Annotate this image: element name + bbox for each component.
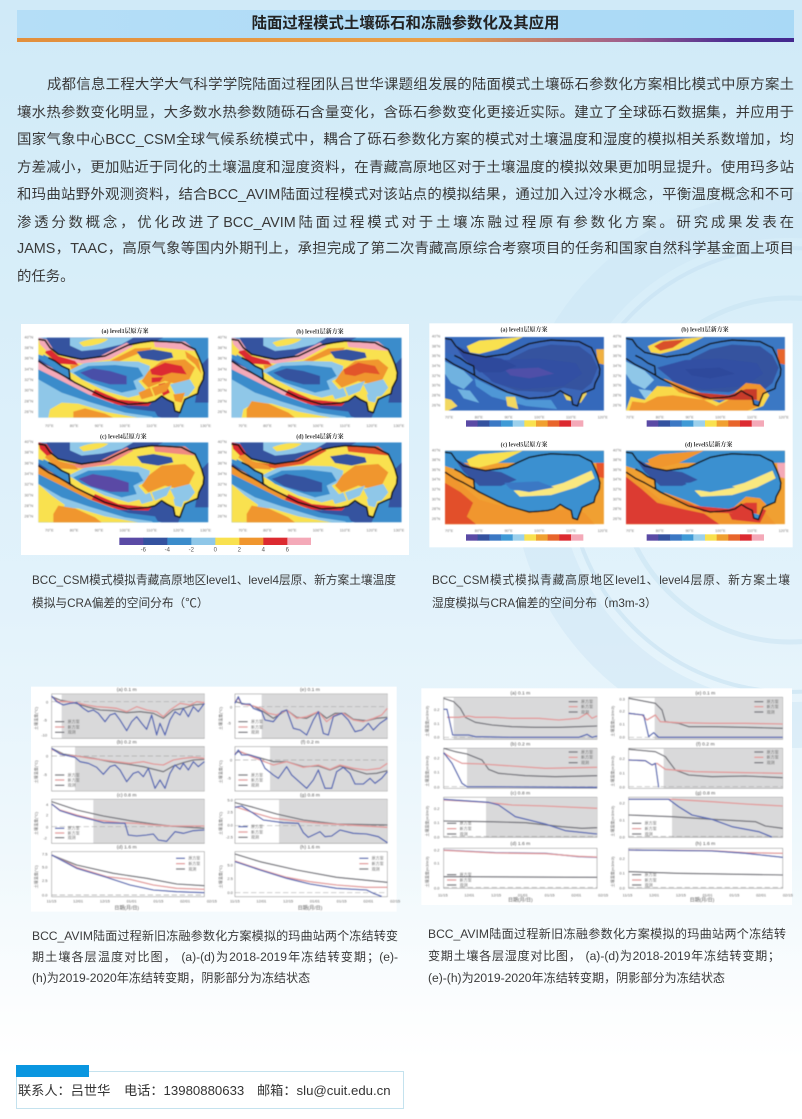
map b: 38°N: [218, 345, 227, 350]
moisture chart headings and axes: 0.2: [434, 806, 440, 811]
moisture chart headings and axes: 0.1: [619, 870, 626, 875]
moisture chart headings and axes: 土壤湿度(m3/m3): [424, 856, 430, 887]
chart headings and axes: 2.5: [227, 876, 234, 881]
moisture chart headings and axes: 土壤湿度(m3/m3): [424, 805, 430, 837]
map c: 38°N: [24, 450, 33, 455]
figure: soil moisture bias maps: [429, 323, 793, 548]
moisture chart headings and axes: 土壤湿度(m3/m3): [609, 856, 615, 887]
moisture chart headings and axes: 0.1: [619, 722, 626, 727]
moisture chart headings and axes: 11/15 12/01 12/15 01/01 01/15 02/01 02/15: [438, 893, 609, 898]
chart headings and axes: 0: [230, 704, 233, 709]
moisture chart headings and axes: 0.1: [434, 860, 440, 865]
intro text block: JAMS，TAAC，高原气象等国内外期刊上，承担完成了第二次青藏高原综合考察项目的任务和国家自然科学基金面上项目: [17, 241, 794, 257]
moisture chart headings and axes: (f) 0.2 m: [696, 741, 715, 747]
intro text block: 成都信息工程大学大气科学学院陆面过程团队吕世华课题组发展的陆面模式土壤砾石参数化方案相比模式中原方案土: [47, 77, 794, 93]
moisture chart headings and axes: (a) 0.1 m: [510, 690, 530, 696]
chart headings and axes: 土壤温度(°C): [33, 706, 39, 730]
moisture chart headings and axes: 土壤湿度(m3/m3): [424, 755, 430, 787]
caption: moisture maps: 湿度模拟与CRA偏差的空间分布（m3m-3）: [432, 597, 657, 610]
chart headings and axes: 5.0: [227, 797, 234, 802]
chart headings and axes: 5.0: [227, 863, 234, 868]
moisture chart headings and axes: 0.2: [619, 756, 626, 761]
caption: moisture series: (e)-(h)为2019-2020年冻结转变期，阴影部分为冻结状态: [428, 971, 725, 985]
moisture map b: 30°N: [613, 384, 622, 388]
moisture map a: 28°N: [432, 394, 441, 397]
chart c: 原方案: [68, 825, 80, 831]
moisture chart e: [629, 697, 783, 739]
map a: 40°N: [24, 334, 33, 339]
moisture chart c: 新方案: [460, 825, 472, 831]
moisture map d: [613, 448, 789, 533]
moisture chart h: 原方案: [645, 871, 657, 877]
intro text block: 的任务。: [17, 269, 75, 285]
map d: 70°E 80°E 90°E 100°E 110°E 120°E 130°E: [238, 528, 405, 533]
moisture map c: 36°N: [432, 468, 441, 472]
chart headings and axes: 土壤温度(°C): [217, 865, 223, 888]
contact text: 电话：13980880633: [124, 1083, 244, 1098]
moisture chart headings and axes: 0.1: [434, 770, 440, 775]
moisture map b: [613, 335, 789, 419]
colour bar: -2: [189, 548, 195, 554]
chart headings and axes: 11/15 12/01 12/15 01/01 01/15 02/01 02/15: [230, 899, 401, 904]
chart headings and axes: 0.0: [42, 893, 48, 898]
caption: moisture series: [428, 927, 786, 985]
moisture chart f: 新方案: [767, 754, 779, 760]
moisture map c: 70°E 80°E 90°E 100°E 110°E 120°E: [445, 529, 608, 533]
map b: 26°N: [218, 409, 227, 414]
moisture chart g: [629, 797, 783, 837]
chart a: [52, 694, 204, 738]
caption: moisture maps: BCC_CSM模式模拟青藏高原地区level1、level4层原、新方案土壤: [432, 574, 790, 587]
intro text block: 国家气象中心BCC_CSM全球气候系统模式中，耦合了砾石参数化方案的模式对土壤温度和湿度的模拟相关系数增加，均: [17, 132, 794, 148]
map b: [218, 334, 405, 428]
moisture map b: 34°N: [613, 364, 622, 368]
chart c: 观测: [68, 834, 76, 840]
map titles: [100, 327, 344, 440]
caption: temperature series: (h)为2019-2020年冻结转变期，阴影部分为冻结状态: [32, 971, 310, 985]
moisture chart headings and axes: 11/15 12/01 12/15 01/01 01/15 02/01 02/15: [623, 893, 794, 898]
chart b: 观测: [68, 782, 76, 788]
chart h: 观测: [372, 865, 380, 871]
moisture map c: 32°N: [432, 488, 441, 492]
moisture chart headings and axes: 0.1: [434, 820, 440, 825]
moisture chart headings and axes: 0.1: [434, 721, 440, 726]
moisture map b: 40°N: [613, 335, 622, 339]
chart headings and axes: 0: [46, 824, 49, 829]
chart g: 新方案: [251, 828, 263, 834]
moisture chart headings and axes: 0.0: [434, 735, 440, 740]
map titles: (a) level1层原方案: [101, 327, 149, 335]
chart headings and axes: (e) 0.1 m: [300, 687, 320, 693]
map c: 26°N: [24, 514, 33, 519]
map b: 30°N: [218, 388, 227, 393]
chart headings and axes: 0: [46, 699, 49, 704]
moisture map c: 26°N: [432, 517, 441, 521]
moisture chart b: [444, 748, 597, 788]
contact text: 邮箱：slu@cuit.edu.cn: [257, 1083, 391, 1098]
map d: 40°N: [218, 439, 227, 444]
chart headings and axes: -5: [43, 772, 48, 777]
moisture map a: 30°N: [432, 384, 441, 388]
moisture chart headings and axes: 土壤湿度(m3/m3): [609, 805, 615, 837]
chart headings and axes: 日期(月/日): [298, 906, 323, 912]
colour bar: [119, 538, 311, 554]
chart headings and axes: -5: [227, 720, 232, 725]
chart headings and axes: -2.5: [226, 835, 234, 840]
map c: 36°N: [24, 460, 33, 465]
moisture chart headings and axes: (b) 0.2 m: [510, 741, 530, 747]
map c: 30°N: [24, 492, 33, 497]
moisture chart c: 原方案: [460, 820, 472, 826]
chart headings and axes: (g) 0.8 m: [300, 792, 320, 798]
moisture map a: 34°N: [432, 364, 441, 368]
moisture chart b: 原方案: [581, 748, 593, 754]
map c: 32°N: [24, 482, 33, 487]
moisture chart headings and axes: [424, 690, 794, 904]
map d: 26°N: [218, 514, 227, 519]
chart headings and axes: 2: [46, 813, 49, 818]
caption: moisture maps: [432, 574, 790, 610]
chart f: 原方案: [251, 771, 263, 777]
moisture chart headings and axes: 土壤湿度(m3/m3): [424, 705, 430, 737]
chart headings and axes: 2.5: [42, 878, 48, 883]
moisture map d: 28°N: [613, 507, 622, 511]
moisture chart b: 新方案: [581, 754, 593, 760]
moisture chart headings and axes: 0.0: [434, 784, 440, 789]
chart headings and axes: (b) 0.2 m: [117, 740, 137, 746]
title: 陆面过程模式土壤砾石和冻融参数化及其应用: [252, 15, 559, 32]
colour bar: 4: [262, 548, 266, 554]
chart e: 观测: [251, 729, 259, 735]
moisture map titles: (a) level1层原方案: [500, 325, 548, 333]
chart e: [235, 694, 387, 738]
moisture map d: 26°N: [613, 517, 622, 521]
chart f: 新方案: [251, 776, 263, 782]
map b: 70°E 80°E 90°E 100°E 110°E 120°E 130°E: [238, 423, 405, 428]
map b: 40°N: [218, 334, 227, 339]
moisture map d: 30°N: [613, 497, 622, 501]
map c: 34°N: [24, 471, 33, 476]
map titles: (b) level1层新方案: [296, 328, 344, 336]
map a: 70°E 80°E 90°E 100°E 110°E 120°E 130°E: [45, 423, 211, 428]
chart d: 观测: [188, 865, 196, 871]
moisture chart f: 原方案: [767, 748, 779, 754]
map d: 30°N: [218, 492, 227, 497]
moisture chart headings and axes: 0.1: [619, 817, 626, 822]
chart g: [235, 799, 387, 843]
chart headings and axes: 土壤温度(°C): [217, 706, 223, 730]
chart headings and axes: 土壤温度(°C): [217, 760, 223, 783]
map c: 40°N: [24, 439, 33, 444]
chart a: 原方案: [68, 718, 80, 724]
contact box: [16, 1065, 404, 1109]
moisture chart headings and axes: 0.2: [434, 707, 440, 712]
moisture map c: 40°N: [432, 448, 441, 452]
chart headings and axes: -5: [227, 775, 232, 780]
moisture map c: [432, 448, 608, 533]
moisture map c: 30°N: [432, 497, 441, 501]
moisture chart headings and axes: 0.2: [434, 847, 440, 852]
moisture chart d: 新方案: [460, 876, 472, 882]
map a: 32°N: [24, 377, 33, 382]
moisture chart f: 观测: [767, 759, 775, 765]
map titles: (c) level4层原方案: [100, 432, 147, 440]
caption: temperature maps: [32, 574, 396, 610]
moisture chart headings and axes: 0.2: [619, 709, 626, 714]
moisture map d: 38°N: [613, 458, 622, 462]
chart headings and axes: 0: [230, 758, 233, 763]
moisture chart a: 原方案: [581, 698, 593, 704]
moisture chart headings and axes: 0.2: [434, 755, 440, 760]
moisture chart headings and axes: (e) 0.1 m: [695, 690, 715, 696]
moisture chart headings and axes: 日期(月/日): [690, 898, 715, 904]
moisture chart headings and axes: 0.0: [434, 835, 440, 840]
chart d: 新方案: [188, 860, 200, 866]
map d: 32°N: [218, 482, 227, 487]
chart headings and axes: 日期(月/日): [114, 906, 139, 912]
moisture chart h: 新方案: [645, 876, 657, 882]
chart d: [52, 852, 204, 897]
chart headings and axes: [33, 687, 401, 912]
chart headings and axes: (a) 0.1 m: [117, 687, 137, 693]
moisture map a: 70°E 80°E 90°E 100°E 110°E 120°E: [445, 415, 608, 419]
moisture map d: 32°N: [613, 488, 622, 492]
chart e: 原方案: [251, 718, 263, 724]
map b: 36°N: [218, 356, 227, 361]
chart f: 观测: [251, 782, 259, 788]
moisture chart headings and axes: (g) 0.8 m: [695, 791, 715, 797]
map d: 36°N: [218, 460, 227, 465]
map b: 34°N: [218, 366, 227, 371]
moisture map b: 26°N: [613, 403, 622, 407]
map titles: (d) level4层新方案: [296, 432, 344, 440]
chart e: 新方案: [251, 723, 263, 729]
contact text: 联系人：吕世华: [18, 1083, 110, 1098]
map b: 32°N: [218, 377, 227, 382]
chart headings and axes: 2.5: [227, 809, 234, 814]
chart headings and axes: 4: [46, 802, 49, 807]
chart g: 原方案: [251, 823, 263, 829]
moisture chart g: 原方案: [645, 820, 657, 826]
moisture map b: 38°N: [613, 344, 622, 348]
chart headings and axes: 土壤温度(°C): [33, 760, 39, 783]
chart a: 观测: [68, 729, 76, 735]
moisture chart e: 新方案: [767, 703, 779, 709]
moisture map titles: (c) level5层原方案: [501, 440, 547, 448]
chart headings and axes: 0.0: [227, 823, 234, 828]
caption: temperature series: [32, 929, 398, 985]
intro text block: [17, 76, 794, 285]
chart g: 观测: [251, 834, 259, 840]
map d: 38°N: [218, 450, 227, 455]
title bar: [17, 10, 794, 42]
colour bar: -4: [165, 548, 171, 554]
moisture chart g: 新方案: [645, 825, 657, 831]
map a: 30°N: [24, 388, 33, 393]
moisture chart headings and axes: 0.1: [619, 771, 626, 776]
chart headings and axes: 0: [46, 753, 49, 758]
moisture map b: 70°E 80°E 90°E 100°E 110°E 120°E: [626, 415, 789, 419]
chart headings and axes: (d) 1.6 m: [117, 845, 137, 851]
moisture chart f: [629, 748, 783, 788]
moisture map a: 40°N: [432, 335, 441, 339]
map d: 28°N: [218, 503, 227, 508]
moisture map d: 34°N: [613, 478, 622, 482]
map c: 70°E 80°E 90°E 100°E 110°E 120°E 130°E: [45, 528, 211, 533]
map c: 28°N: [24, 503, 33, 508]
moisture chart headings and axes: 土壤湿度(m3/m3): [609, 755, 615, 787]
moisture chart e: 观测: [767, 708, 775, 714]
intro text block: 壤水热参数变化明显，大多数水热参数随砾石含量变化，含砾石参数变化更接近实际。建立了全球砾石数据集，并应用于: [17, 105, 794, 121]
moisture map d: 40°N: [613, 448, 622, 452]
moisture chart g: 观测: [645, 830, 653, 836]
chart b: [52, 747, 204, 791]
chart headings and axes: (c) 0.8 m: [117, 792, 137, 798]
map a: 26°N: [24, 409, 33, 414]
colour bar: 0: [214, 548, 218, 554]
chart b: 原方案: [68, 771, 80, 777]
colour bar: 2: [238, 548, 242, 554]
moisture chart d: 观测: [460, 881, 468, 887]
chart headings and axes: 7.5: [42, 851, 48, 856]
moisture chart headings and axes: (d) 1.6 m: [510, 841, 530, 847]
caption: temperature maps: BCC_CSM模式模拟青藏高原地区level1、level4层原、新方案土壤温度: [32, 574, 396, 587]
moisture chart headings and axes: (c) 0.8 m: [510, 791, 530, 797]
intro text block: 方差减小，更加贴近于同化的土壤温度和湿度资料，在青藏高原地区对于土壤温度的模拟效果更加明显提升。使用玛多站: [17, 160, 794, 176]
moisture chart e: 原方案: [767, 698, 779, 704]
moisture chart headings and axes: 土壤湿度(m3/m3): [609, 705, 615, 737]
moisture chart c: 观测: [460, 830, 468, 836]
chart headings and axes: -10: [41, 733, 48, 738]
moisture map a: 38°N: [432, 344, 441, 348]
chart headings and axes: -5: [43, 718, 48, 723]
caption: temperature series: BCC_AVIM陆面过程新旧冻融参数化方案模拟的玛曲站两个冻结转变: [32, 929, 398, 943]
moisture chart a: [444, 697, 597, 739]
chart c: [52, 799, 204, 843]
map c: [24, 439, 211, 533]
chart headings and axes: 0.0: [227, 890, 234, 895]
moisture map b: 32°N: [613, 374, 622, 378]
chart h: 原方案: [372, 855, 384, 861]
caption: temperature maps: 模拟与CRA偏差的空间分布（℃）: [32, 597, 209, 610]
moisture chart headings and axes: 日期(月/日): [508, 898, 533, 904]
moisture chart headings and axes: 0.0: [619, 835, 626, 840]
chart headings and axes: 土壤温度(°C): [217, 811, 223, 835]
map a: [24, 334, 211, 428]
moisture chart b: 观测: [581, 759, 589, 765]
moisture map c: 38°N: [432, 458, 441, 462]
caption: moisture series: 变期土壤各层湿度对比图， (a)-(d)为2018-2019年冻结转变期；: [428, 949, 780, 963]
caption: temperature series: 期土壤各层温度对比图， (a)-(d)为2018-2019年冻结转变期；(e)-: [32, 950, 398, 964]
moisture map b: 36°N: [613, 354, 622, 358]
moisture chart d: 原方案: [460, 871, 472, 877]
moisture map c: 28°N: [432, 507, 441, 511]
intro text block: 和玛曲站野外观测资料，结合BCC_AVIM陆面过程模式对该站点的模拟结果，通过加入过冷水概念，平衡温度概念和不可: [17, 187, 794, 203]
moisture map a: 36°N: [432, 354, 441, 358]
chart headings and axes: 土壤温度(°C): [33, 811, 39, 835]
moisture chart headings and axes: 0.2: [619, 801, 626, 806]
chart headings and axes: 5.0: [42, 865, 48, 870]
colour bar: -6: [141, 548, 147, 554]
moisture map a: [432, 335, 608, 419]
map b: 28°N: [218, 398, 227, 403]
map d: 34°N: [218, 471, 227, 476]
chart h: [235, 852, 387, 897]
moisture map titles: (d) level5层新方案: [685, 441, 732, 449]
chart a: 新方案: [68, 723, 80, 729]
moisture map titles: [500, 325, 732, 449]
map a: 36°N: [24, 356, 33, 361]
chart headings and axes: (f) 0.2 m: [301, 740, 319, 746]
moisture chart h: [629, 848, 783, 888]
moisture chart headings and axes: 0.3: [619, 697, 626, 702]
map a: 28°N: [24, 398, 33, 403]
moisture map d: 70°E 80°E 90°E 100°E 110°E 120°E: [626, 529, 789, 533]
figure: soil temperature bias maps: [21, 324, 409, 555]
moisture chart headings and axes: 0.0: [619, 784, 626, 789]
moisture chart d: [444, 848, 597, 888]
moisture map b: 28°N: [613, 394, 622, 397]
moisture chart a: 新方案: [581, 703, 593, 709]
moisture map a: 32°N: [432, 374, 441, 378]
moisture chart headings and axes: 0.0: [619, 735, 626, 740]
moisture chart headings and axes: (h) 1.6 m: [695, 841, 715, 847]
moisture chart h: 观测: [645, 881, 653, 887]
map d: [218, 439, 405, 533]
chart headings and axes: 土壤温度(°C): [33, 865, 39, 888]
contact tab: [16, 1065, 89, 1077]
moisture chart headings and axes: 0.0: [434, 885, 440, 890]
chart headings and axes: 11/15 12/01 12/15 01/01 01/15 02/01 02/15: [47, 899, 218, 904]
map a: 38°N: [24, 345, 33, 350]
moisture chart headings and axes: 0.2: [619, 856, 626, 861]
chart d: 原方案: [188, 855, 200, 861]
contact text: [18, 1083, 391, 1098]
map a: 34°N: [24, 366, 33, 371]
moisture map c: 34°N: [432, 478, 441, 482]
moisture map a: 26°N: [432, 403, 441, 407]
chart h: 新方案: [372, 860, 384, 866]
title underline: [17, 38, 794, 42]
chart b: 新方案: [68, 776, 80, 782]
chart headings and axes: -2: [43, 835, 48, 840]
moisture chart a: 观测: [581, 708, 589, 714]
caption: moisture series: BCC_AVIM陆面过程新旧冻融参数化方案模拟的玛曲站两个冻结转: [428, 927, 786, 941]
moisture chart c: [444, 797, 597, 837]
chart headings and axes: (h) 1.6 m: [300, 845, 320, 851]
moisture chart headings and axes: 0.0: [619, 885, 626, 890]
moisture map titles: (b) level1层新方案: [681, 326, 729, 334]
chart f: [235, 747, 387, 791]
chart c: 新方案: [68, 829, 80, 835]
moisture map d: 36°N: [613, 468, 622, 472]
colour bar: 6: [286, 548, 290, 554]
intro text block: 渗透分数概念，优化改进了BCC_AVIM陆面过程模式对于土壤冻融过程原有参数化方案。研究成果发表在: [17, 215, 794, 231]
moisture colour bars: [466, 420, 764, 541]
